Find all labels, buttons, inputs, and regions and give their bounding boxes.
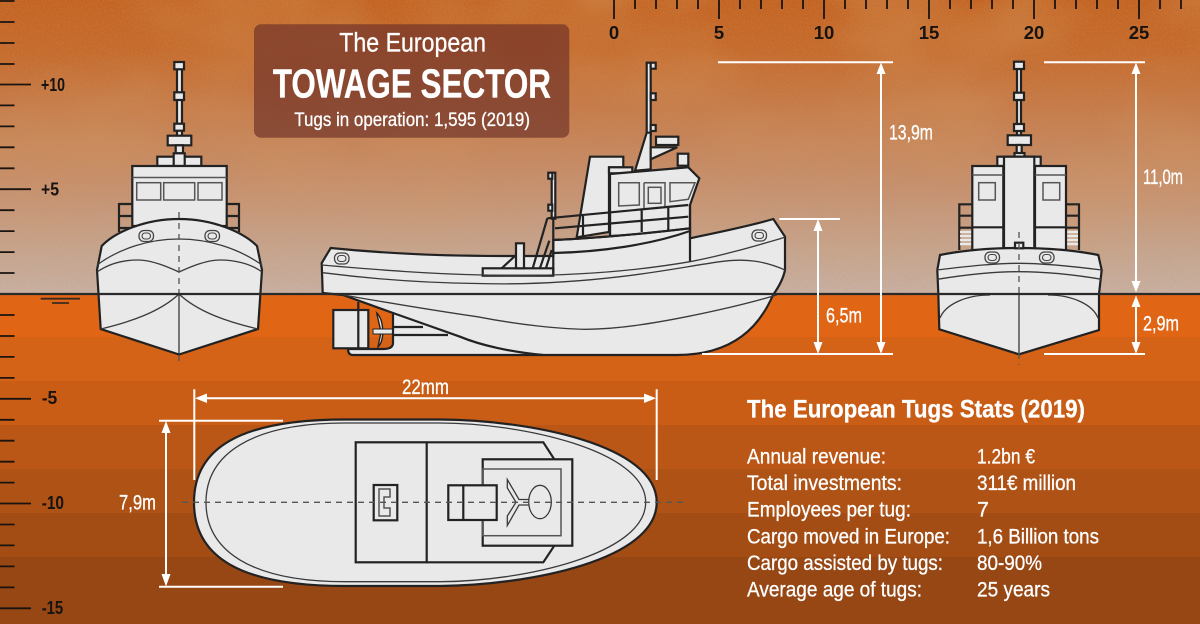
background: rusty sky: [0, 0, 1200, 294]
dimension: beam 7,9m: 7,9m: [119, 492, 156, 514]
dimension: air draft 11,0m: 11,0m: [1143, 166, 1183, 189]
stats labels: Cargo assisted by tugs:: [747, 551, 943, 575]
horizontal ruler: metres along the tug: 5: [714, 22, 724, 43]
stats labels: Average age of tugs:: [747, 578, 922, 602]
mast: [1008, 62, 1031, 157]
dimension: hull height 6,5m: [702, 219, 893, 354]
stern bitt: [1015, 243, 1023, 248]
railing: [547, 205, 690, 262]
wheelhouse: [132, 153, 227, 226]
stats values: 25 years: [977, 578, 1050, 602]
title: kicker: The European: [339, 28, 486, 58]
title panel: [254, 24, 569, 138]
aft mast: [548, 173, 555, 219]
aft deck rectangle: [356, 442, 427, 562]
hull: [322, 219, 785, 355]
bollards: [334, 230, 766, 264]
stats values: 1.2bn €: [977, 444, 1035, 468]
forward deckhouse: [427, 442, 572, 562]
vertical ruler: metres above and below the waterline: [0, 1, 65, 618]
side rails: [119, 204, 239, 232]
background: banded water depths: [0, 294, 1200, 624]
hull lines: [97, 239, 262, 354]
rear view tug (right): [937, 62, 1102, 365]
hull: [97, 219, 262, 354]
title: main heading: TOWAGE SECTOR: [273, 60, 551, 106]
bollards: [985, 252, 1054, 263]
dimension: length 22mm: [194, 376, 657, 480]
funnel: [577, 157, 623, 237]
dimension: overall height 13,9m: [718, 62, 933, 354]
vertical ruler: metres above and below the waterline: +5: [41, 179, 59, 200]
deck outline: [194, 420, 657, 586]
top-down plan view of tug: [182, 420, 685, 586]
horizontal ruler: metres along the tug: 15: [919, 22, 939, 43]
stats values: 80-90%: [977, 551, 1042, 575]
horizontal ruler: metres along the tug: 10: [814, 22, 834, 43]
horizontal ruler: metres along the tug: 0: [609, 22, 619, 43]
horizontal ruler: metres along the tug: 20: [1024, 22, 1044, 43]
centre line: [178, 212, 180, 365]
dimension: draught 2,9m: 2,9m: [1143, 312, 1179, 336]
inner bulwark line: [206, 423, 646, 582]
dimension: air draft 11,0m: [1044, 62, 1183, 292]
mast: [168, 62, 191, 184]
stats labels: Total investments:: [747, 471, 902, 495]
stats labels: Employees per tug:: [747, 498, 911, 522]
stats labels: [747, 444, 950, 602]
stats heading: The European Tugs Stats (2019): [747, 396, 1085, 424]
stats values: 7: [977, 498, 989, 522]
dimension: beam 7,9m: [119, 421, 283, 587]
dimension: hull height 6,5m: 6,5m: [826, 304, 862, 328]
rudder and propeller: [333, 302, 393, 348]
centre line: [1018, 232, 1020, 365]
vertical ruler: metres above and below the waterline: +10: [41, 74, 65, 95]
dimension: overall height 13,9m: 13,9m: [889, 122, 933, 144]
superstructure: [972, 157, 1066, 250]
vertical ruler: metres above and below the waterline: -15: [42, 597, 63, 618]
horizontal ruler: metres along the tug: 25: [1129, 22, 1149, 43]
centre line: [182, 501, 685, 503]
stats labels: Annual revenue:: [747, 444, 886, 468]
title: subtitle: Tugs in operation: 1,595 (2019): [294, 109, 530, 131]
stats values: 311€ million: [977, 471, 1076, 495]
side ladders: [959, 204, 1079, 250]
bollards: [139, 230, 220, 242]
horizontal ruler: metres along the tug: [609, 0, 1181, 43]
stats values: 1,6 Billion tons: [977, 524, 1099, 548]
radar mast symbol: [507, 480, 551, 526]
hull lines: [937, 263, 1102, 354]
vertical ruler: metres above and below the waterline: -10: [42, 492, 64, 513]
stats values: [977, 444, 1099, 602]
underwater lines: [393, 313, 543, 355]
vertical ruler: metres above and below the waterline: -5: [42, 387, 57, 408]
stats panel: [747, 396, 1099, 602]
aft deck box and fittings: [483, 218, 553, 276]
hull: [937, 248, 1102, 354]
side view tug: [322, 63, 785, 355]
waterline: [0, 294, 1200, 303]
wheelhouse: [609, 167, 699, 236]
dimension: draught 2,9m: [1044, 296, 1179, 354]
hull lines: [322, 237, 785, 329]
mast and radar: [635, 63, 688, 171]
dimension: length 22mm: 22mm: [402, 376, 449, 399]
front view tug (left): [97, 62, 262, 365]
stats labels: Cargo moved in Europe:: [747, 524, 950, 548]
